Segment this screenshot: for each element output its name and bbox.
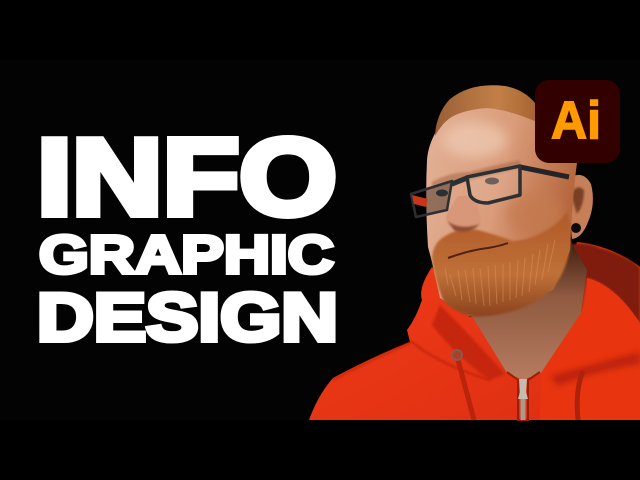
eye left <box>436 190 448 196</box>
cheek warm shade <box>507 193 563 237</box>
photo: man in red hoodie <box>309 85 640 420</box>
title line: GRAPHIC: GRAPHIC <box>39 225 334 285</box>
drawstring right <box>577 371 583 420</box>
nose <box>446 196 481 228</box>
left lens <box>411 181 452 217</box>
hood shadow <box>550 352 640 386</box>
beard <box>432 212 571 316</box>
icon: Adobe Illustrator <box>535 80 620 163</box>
title line: INFO: INFO <box>37 116 337 238</box>
beard texture <box>445 240 555 306</box>
forehead highlight <box>443 122 507 158</box>
brow shadow <box>432 160 520 188</box>
eye right <box>485 178 499 184</box>
right lens <box>467 166 520 203</box>
lens red reflection <box>412 195 428 207</box>
bridge <box>452 178 467 184</box>
neck <box>462 240 587 380</box>
glasses <box>411 166 569 217</box>
face <box>426 102 577 316</box>
inner ear shadow <box>571 187 584 214</box>
icon tile <box>535 80 620 163</box>
icon letters Ai: Ai <box>551 92 601 150</box>
zipper pull <box>518 379 528 399</box>
zipper <box>507 372 540 420</box>
glasses temple <box>520 167 569 177</box>
hoodie body <box>309 242 640 420</box>
hood left edge shadow <box>432 305 505 380</box>
drawstring eyelet <box>452 350 462 360</box>
mouth <box>448 243 508 258</box>
ear plug <box>571 223 581 233</box>
shoulder seam <box>333 342 490 380</box>
hood interior <box>560 243 640 325</box>
title: INFO GRAPHIC DESIGN <box>37 116 338 356</box>
drawstring left <box>457 356 474 420</box>
zipper placket <box>507 372 540 420</box>
photo area background <box>0 60 640 420</box>
ear <box>566 175 593 239</box>
title line: DESIGN: DESIGN <box>37 280 338 356</box>
hair <box>435 85 540 136</box>
zipper teeth <box>520 396 526 420</box>
hood right fold <box>540 278 640 420</box>
nose shadow <box>447 221 480 232</box>
